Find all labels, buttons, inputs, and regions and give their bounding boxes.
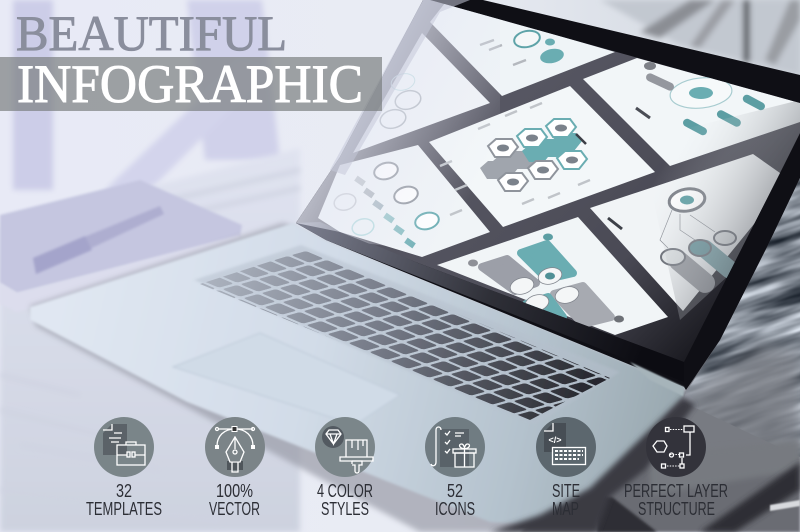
- feature: 32 templates: [86, 417, 162, 519]
- icon: checklist and gift: [425, 417, 485, 477]
- title band: [0, 57, 382, 111]
- icon: layer diagram: [646, 417, 706, 477]
- label: STRUCTURE: [638, 499, 715, 519]
- slide: top right: [583, 58, 800, 166]
- label: PERFECT LAYER: [624, 481, 728, 501]
- label: 4 COLOR: [317, 481, 373, 501]
- label: [86, 481, 162, 519]
- icon: document and briefcase: [94, 417, 154, 477]
- label: MAP: [552, 499, 579, 519]
- label: [552, 481, 580, 519]
- slide: top centre: [430, 3, 615, 96]
- label: SITE: [552, 481, 580, 501]
- silver hinge corner: [630, 362, 684, 396]
- feature: site map: [536, 417, 596, 519]
- title: BEAUTIFUL: BEAUTIFUL: [16, 5, 287, 61]
- slide: top left faded: [353, 33, 490, 153]
- label: STYLES: [321, 499, 369, 519]
- dark lower edge of laptop: [490, 397, 695, 532]
- label: VECTOR: [209, 499, 260, 519]
- label: [209, 481, 260, 519]
- wood table, right side: [520, 178, 800, 532]
- title: INFOGRAPHIC: INFOGRAPHIC: [17, 54, 363, 114]
- feature: perfect layer structure: [624, 417, 728, 519]
- laptop lid: [296, 0, 800, 396]
- keyboard well: [194, 245, 620, 425]
- label: [317, 481, 373, 519]
- feature: 4 color styles: [315, 417, 375, 519]
- slide: left middle: [318, 145, 490, 257]
- notebook: [0, 180, 242, 312]
- slides on screen: [296, 0, 800, 335]
- blurred lower part of table: [650, 345, 800, 470]
- label: [435, 481, 475, 519]
- white wash over left of screen: [296, 0, 500, 260]
- feature: 52 icons: [425, 417, 485, 519]
- screen shade at right: [662, 102, 800, 320]
- icon: diamond and paint brush: [315, 417, 375, 477]
- label: ICONS: [435, 499, 475, 519]
- laptop base: [30, 223, 695, 532]
- icon: pen tool: [205, 417, 265, 477]
- label: [624, 481, 728, 519]
- icon: code file and keyboard: </>: [548, 435, 562, 445]
- top bezel wash: [330, 0, 470, 175]
- label: TEMPLATES: [86, 499, 162, 519]
- screen bezel: [296, 0, 800, 390]
- label: 32: [116, 481, 132, 501]
- slide: bottom centre: [437, 217, 668, 335]
- label: 100%: [216, 481, 253, 501]
- pen: [33, 206, 164, 274]
- label: 52: [447, 481, 463, 501]
- trackpad: [173, 333, 400, 425]
- slide: bottom right: [590, 154, 790, 311]
- keyboard keys: [200, 252, 610, 420]
- feature: 100% vector: [205, 417, 265, 519]
- desk shadow bands: [700, 462, 800, 532]
- slide: centre hexagons: [429, 86, 655, 227]
- desk surface: [0, 148, 300, 532]
